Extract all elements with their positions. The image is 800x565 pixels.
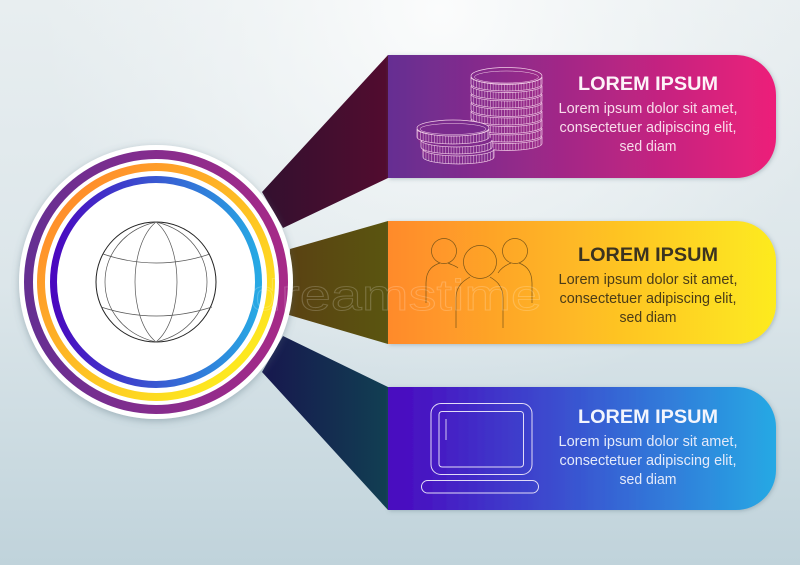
text block: Lorem ipsum dolor sit amet, bbox=[558, 434, 738, 450]
text block: consectetuer adipiscing elit, bbox=[560, 291, 736, 307]
panel: laptop bbox=[388, 387, 776, 510]
watermark: dreamstime bbox=[250, 271, 542, 320]
connector wedge: bottom bbox=[262, 336, 388, 510]
text block bbox=[558, 101, 738, 155]
connector wedge: middle bbox=[289, 221, 388, 344]
central circle with rings and globe bbox=[19, 145, 293, 419]
text block: sed diam bbox=[620, 139, 676, 155]
icon: laptop bbox=[422, 404, 538, 493]
heading: LOREM IPSUM bbox=[578, 407, 718, 428]
text block: consectetuer adipiscing elit, bbox=[560, 120, 736, 136]
text block bbox=[558, 272, 738, 326]
icon: three people bbox=[426, 238, 532, 328]
text block: consectetuer adipiscing elit, bbox=[560, 453, 736, 469]
heading: LOREM IPSUM bbox=[578, 245, 718, 266]
panel: coins bbox=[388, 55, 776, 178]
panel: people bbox=[388, 221, 776, 344]
connector wedge: top bbox=[262, 55, 388, 228]
heading: LOREM IPSUM bbox=[578, 74, 718, 95]
text block: Lorem ipsum dolor sit amet, bbox=[558, 101, 738, 117]
text block: Lorem ipsum dolor sit amet, bbox=[558, 272, 738, 288]
text block: sed diam bbox=[620, 310, 676, 326]
icon: globe bbox=[96, 222, 216, 342]
text block: sed diam bbox=[620, 472, 676, 488]
text block bbox=[558, 434, 738, 488]
icon: stacks of coins bbox=[417, 68, 542, 164]
